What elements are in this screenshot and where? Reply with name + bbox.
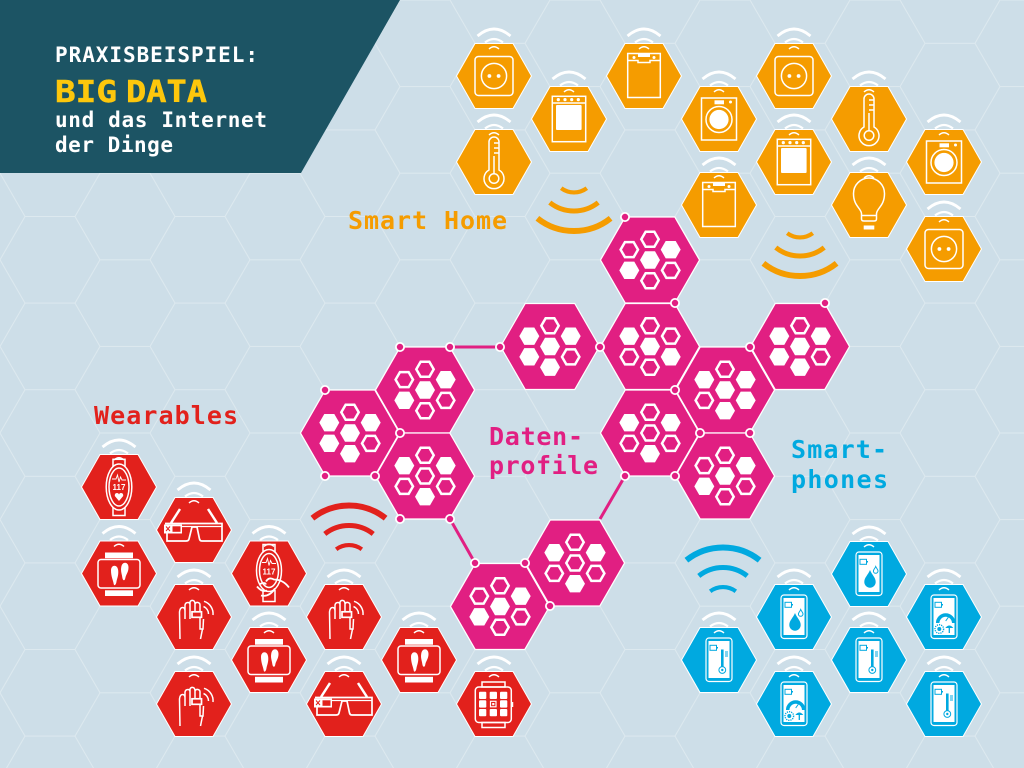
heading: Wearables: Wearables [94,401,238,430]
hexagon: data profile 4 [676,347,774,433]
icon: smart ring hand [306,570,382,650]
icon: smart glasses [306,657,382,736]
icon: smart glasses [156,483,232,562]
group: smartphone devices [682,527,982,736]
icon: phone weather gauge [906,570,982,650]
hexagon: data profile 10 [376,347,474,433]
heading: Smartphones: phones [791,465,888,494]
panel: title [0,0,400,173]
heading: Datenprofile: profile [489,451,598,480]
heading: Smart Home: Smart Home [348,206,507,235]
icon: socket [456,29,532,108]
icon: smart ring hand [156,657,232,736]
icon: signal waves, smart home left [537,188,611,231]
icon: dishwasher [682,158,756,238]
icon: washing machine [906,115,982,194]
icon: signal waves, smartphones [686,547,760,591]
icon: smart ring hand [156,570,232,650]
icon: signal waves, smart home right [763,233,837,276]
icon: fitness band: 117 [113,483,126,492]
icon: washing machine [682,72,756,152]
panel: title: BIG [55,75,117,110]
connector nodes [321,213,829,610]
hexagon: data profile 8 [526,520,624,606]
icon: fitness band with hand [232,526,306,606]
hexagon: data profile 11 [300,390,400,476]
connector lines between data profiles [450,347,625,563]
icon: phone humidity [756,570,832,650]
icon: smart watch [456,657,532,736]
hexagon: data profile 9 [450,564,550,650]
hexagon: data profile 6 [600,390,700,476]
icon: phone weather gauge [756,657,832,736]
icon: step tracker [82,526,156,606]
heading: Datenprofile: Daten- [489,422,583,451]
icon: thermometer [832,72,906,152]
icon: oven [532,72,606,152]
panel: title: der Dinge [55,133,173,157]
icon: socket [756,29,832,108]
hexagon: data profile 12 [376,433,474,519]
group: wearable devices [82,440,532,736]
icon: fitness band [82,440,156,520]
icon: fitness band with hand: 117 [263,568,276,576]
icon: phone humidity [832,527,906,606]
group: data profile hexagons [300,217,850,650]
icon: signal waves, wearables [312,505,386,549]
panel: title: DATA [126,75,207,110]
group: smart home devices [456,29,982,282]
panel: title: und das Internet [55,108,267,132]
hexagon: data profile 2 [500,304,600,390]
hexagon: data profile 1 [600,217,700,303]
icon: phone thermometer [682,613,756,692]
hexagon: data profile 5 [750,304,850,390]
icon: phone thermometer [906,657,982,736]
icon: dishwasher [606,29,682,108]
panel: title: PRAXISBEISPIEL: [55,43,258,67]
icon: phone thermometer [832,613,906,692]
icon: step tracker [232,613,306,692]
hexagon: data profile 3 [600,304,700,390]
icon: thermometer [456,115,532,194]
hexagon: data profile 7 [676,433,774,519]
icon: socket [906,202,982,282]
icon: oven [756,115,832,194]
icon: step tracker [382,613,456,692]
icon: light bulb [832,158,906,238]
heading: Smartphones: Smart- [791,435,887,464]
